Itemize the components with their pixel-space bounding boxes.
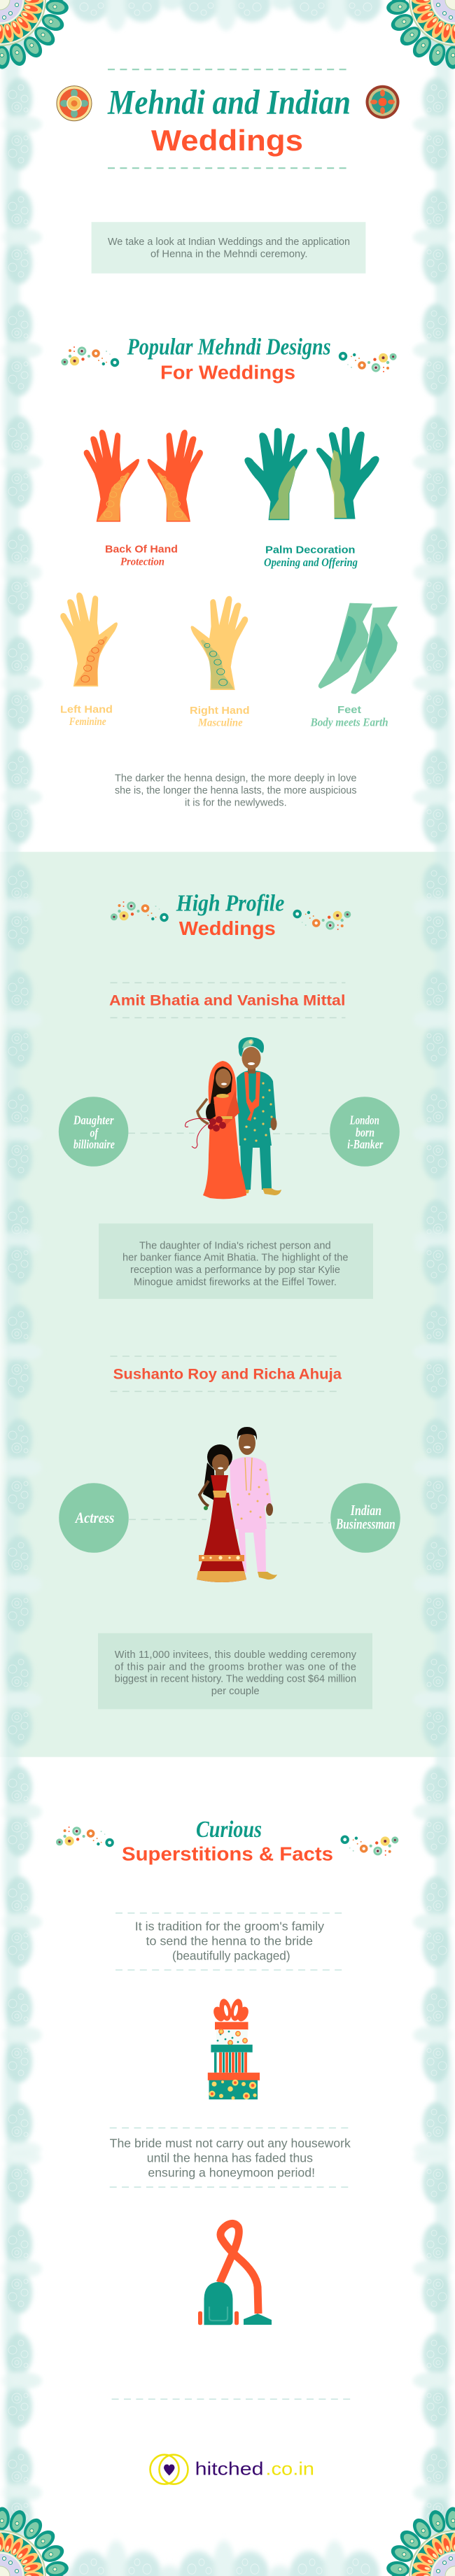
connector lines couple two [129, 1519, 330, 1523]
text: no housework: until the henna has faded thus [147, 2151, 313, 2165]
label: back of hand: Back Of Hand [105, 543, 178, 555]
label: right hand [190, 705, 249, 729]
text: no housework: The bride must not carry out any housework [110, 2136, 351, 2150]
icon: confetti right [340, 1835, 398, 1856]
title block: Weddings [151, 124, 303, 157]
circle: indian businessman [330, 1483, 400, 1553]
icon: gift boxes [208, 1998, 260, 2099]
icon: left medallion [57, 86, 92, 121]
circle: daughter of billionaire [59, 1097, 128, 1167]
circle: daughter of billionaire: billionaire [74, 1137, 115, 1151]
icon: confetti right [293, 910, 351, 930]
hands: palm decoration [244, 427, 379, 520]
circle: london born i-banker [330, 1097, 400, 1167]
label: right hand: Right Hand [190, 705, 249, 717]
text: henna tradition: It is tradition for the groom's family [135, 1919, 324, 1933]
panel: amit and vanisha text [99, 1223, 373, 1299]
heading: high profile weddings [176, 891, 284, 939]
hands: back of hand [84, 430, 203, 522]
panel: amit and vanisha text: reception was a performance by pop star Kylie [130, 1265, 340, 1276]
panel: sushanto and richa text: per couple [211, 1686, 260, 1697]
heading: high profile weddings: High Profile [176, 891, 284, 917]
circle: actress [59, 1483, 129, 1553]
feet [318, 603, 398, 694]
panel: high profile weddings background [0, 852, 455, 1757]
heading: curious superstitions and facts: Superstitions & Facts [122, 1843, 333, 1864]
icon: confetti left [61, 346, 119, 367]
text: henna tradition: to send the henna to the bride [146, 1934, 313, 1948]
label: left hand: Left Hand [60, 703, 113, 715]
heading: popular mehndi designs: For Weddings [160, 362, 295, 383]
circle: indian businessman: Businessman [335, 1515, 396, 1532]
icon: right medallion [365, 85, 399, 119]
heading: amit bhatia and vanisha mittal: Amit Bhatia and Vanisha Mittal [109, 993, 345, 1009]
logo: hitched.co.in: .co.in [265, 2458, 314, 2479]
heading: popular mehndi designs [127, 335, 331, 383]
circle: daughter of billionaire: of [90, 1125, 99, 1139]
panel: intro: We take a look at Indian Weddings and the application [108, 237, 350, 248]
hand: right hand [191, 596, 248, 690]
illustration: couple one [186, 1037, 281, 1199]
divider above logo [112, 2398, 354, 2400]
label: right hand: Masculine [197, 717, 243, 729]
text: henna tradition: (beautifully packaged) [172, 1949, 290, 1963]
circle: london born i-banker: London [349, 1113, 379, 1127]
label: palm decoration: Palm Decoration [265, 544, 356, 556]
label: feet: Body meets Earth [310, 715, 388, 729]
circle: actress: Actress [74, 1509, 114, 1526]
connector lines couple one [128, 1132, 330, 1134]
label: palm decoration: Opening and Offering [264, 556, 358, 569]
panel: sushanto and richa text [98, 1633, 372, 1709]
text: henna meaning: it is for the newlyweds. [185, 797, 287, 808]
circle: london born i-banker: i-Banker [347, 1137, 384, 1151]
text: henna meaning: she is, the longer the henna lasts, the more auspicious [115, 785, 357, 796]
text: henna meaning [115, 773, 357, 808]
panel: intro: of Henna in the Mehndi ceremony. [150, 248, 308, 260]
circle: daughter of billionaire: Daughter [73, 1113, 114, 1127]
logo: hitched.co.in: hitched [195, 2458, 263, 2479]
circle: london born i-banker: born [356, 1125, 374, 1139]
text: no housework: ensuring a honeymoon period! [148, 2165, 315, 2179]
label: left hand: Feminine [69, 716, 106, 728]
text: henna meaning: The darker the henna design, the more deeply in love [115, 773, 356, 784]
panel: amit and vanisha text: The daughter of India's richest person and [139, 1240, 331, 1251]
icon: confetti left [111, 901, 169, 922]
heading: curious superstitions and facts [122, 1817, 333, 1864]
heading: high profile weddings: Weddings [179, 917, 276, 939]
icon: confetti right [339, 352, 397, 372]
hand: left hand [60, 593, 118, 687]
illustration: couple two [197, 1427, 277, 1582]
panel: amit and vanisha text: her banker fiance Amit Bhatia. The highlight of the [122, 1253, 349, 1264]
title block: Mehndi and Indian [107, 83, 351, 122]
label: back of hand: Protection [120, 556, 164, 568]
heading: popular mehndi designs: Popular Mehndi Designs [127, 335, 331, 360]
title block [107, 69, 351, 168]
heading: curious superstitions and facts: Curious [196, 1817, 262, 1843]
panel: sushanto and richa text: of this pair and the grooms brother was one of the [115, 1661, 356, 1673]
panel: sushanto and richa text: With 11,000 invitees, this double wedding ceremony [115, 1649, 357, 1661]
panel: intro [92, 222, 365, 274]
label: feet: Feet [337, 704, 361, 716]
label: palm decoration [264, 544, 358, 569]
panel: sushanto and richa text: biggest in recent history. The wedding cost $64 million [115, 1674, 356, 1685]
icon: confetti left [56, 1827, 114, 1847]
logo: hitched.co.in [150, 2455, 314, 2484]
label: feet [310, 704, 388, 729]
text: henna tradition [115, 1913, 346, 1970]
label: back of hand [105, 543, 178, 568]
label: left hand [60, 703, 113, 728]
panel: amit and vanisha text: Minogue amidst fireworks at the Eiffel Tower. [134, 1276, 337, 1288]
text: no housework [110, 2128, 351, 2187]
heading: sushanto roy and richa ahuja: Sushanto Roy and Richa Ahuja [113, 1367, 342, 1383]
circle: indian businessman: Indian [350, 1502, 382, 1519]
icon: vacuum cleaner [198, 2223, 272, 2325]
